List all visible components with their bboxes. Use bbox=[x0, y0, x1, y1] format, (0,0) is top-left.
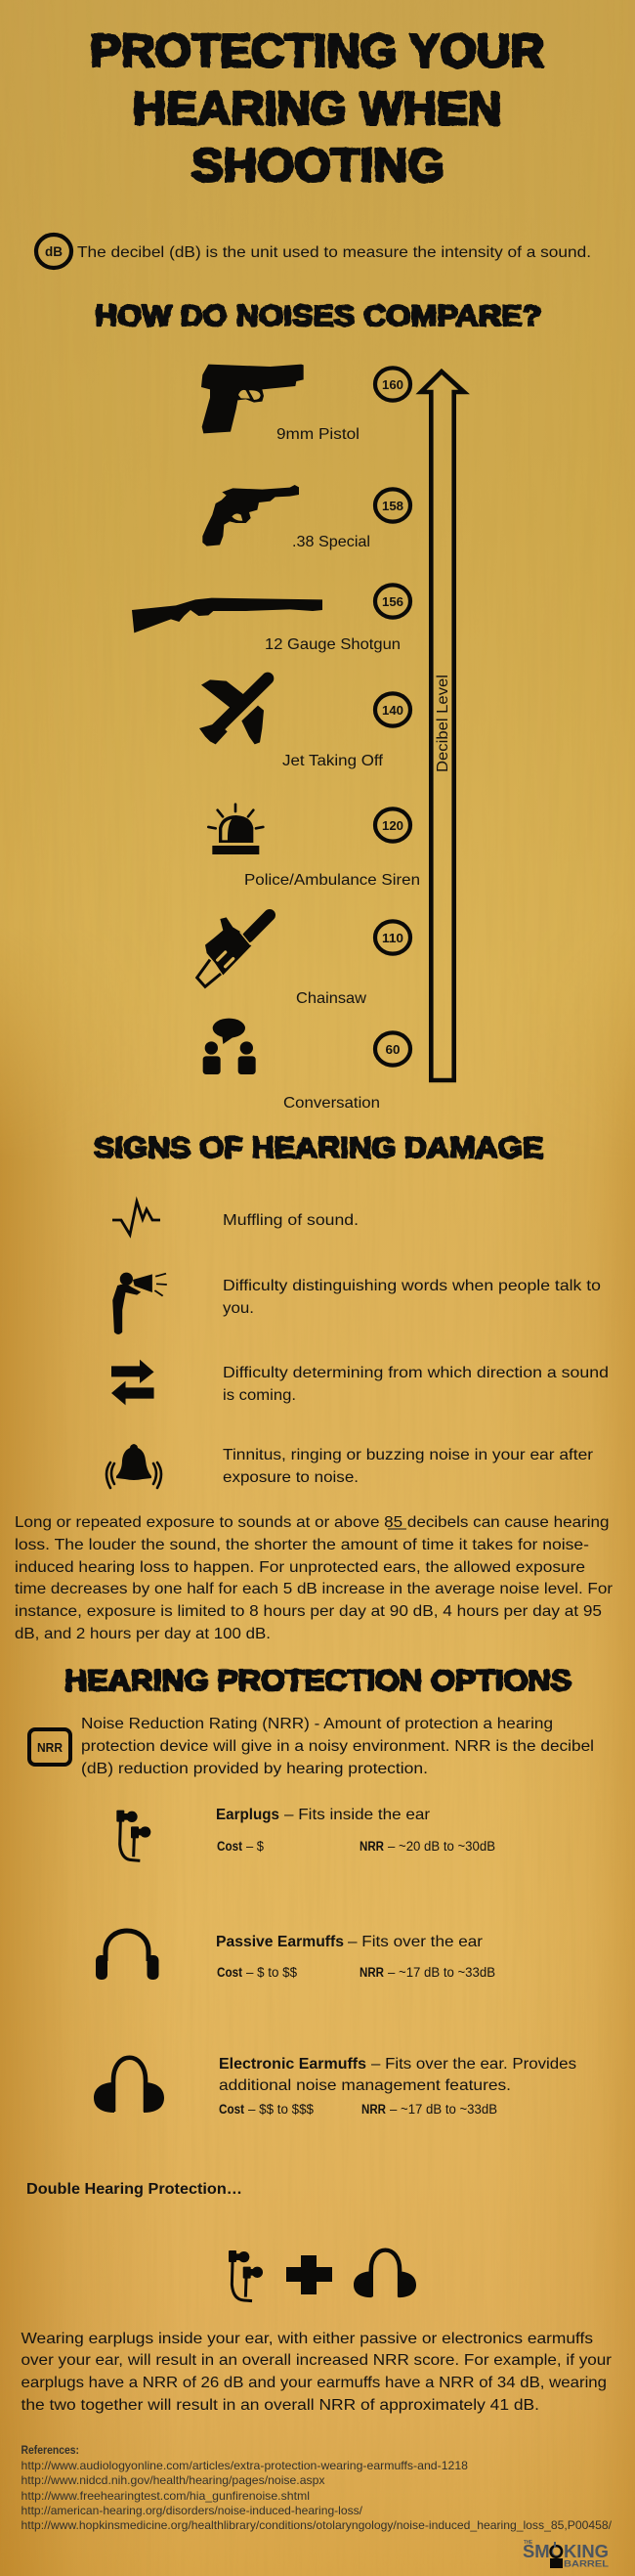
icon: earmuffs bbox=[354, 2250, 416, 2297]
icon: jet bbox=[199, 678, 268, 744]
badge: 156 dB: 156 bbox=[382, 595, 403, 609]
heading: signs of hearing damage: SIGNS OF HEARING DAMAGE bbox=[94, 1132, 543, 1164]
badge: 60 dB bbox=[375, 1032, 410, 1066]
icon: siren bbox=[208, 805, 263, 854]
badge: 140 dB bbox=[375, 693, 410, 726]
noise row: 12 gauge shotgun bbox=[132, 585, 410, 653]
references: http://www.audiologyonline.com/articles/extra-protection-wearing-earmuffs-and-1218 bbox=[21, 2459, 468, 2472]
noise row: .38 special bbox=[202, 485, 410, 550]
text: sound direction bbox=[223, 1365, 609, 1404]
text: passive earmuffs NRR: NRR bbox=[360, 1965, 384, 1980]
icon: electronic earmuffs bbox=[94, 2058, 164, 2113]
icon: dB badge bbox=[36, 235, 71, 268]
icon: conversation bbox=[203, 1019, 256, 1074]
text: passive earmuffs cost: Cost bbox=[217, 1965, 242, 1980]
badge: 60 dB: 60 bbox=[385, 1043, 401, 1057]
text block: exposure explanation: instance, exposure is limited to 8 hours per day at 90 dB, 4 hours per day at 95 bbox=[15, 1603, 602, 1620]
text: passive earmuffs title bbox=[216, 1934, 484, 1950]
option: electronic earmuffs bbox=[94, 2056, 576, 2117]
references: References: bbox=[21, 2443, 79, 2457]
label: .38 special: .38 Special bbox=[292, 534, 370, 550]
icon: person with megaphone bbox=[112, 1273, 167, 1334]
badge: 110 dB bbox=[375, 921, 410, 954]
text: earplugs title: Earplugs bbox=[216, 1807, 279, 1823]
text: electronic earmuffs description: additional noise management features. bbox=[219, 2077, 511, 2094]
text block: double protection explanation bbox=[21, 2331, 613, 2414]
text: earplugs NRR: NRR bbox=[360, 1839, 384, 1854]
label: 12 gauge shotgun: 12 Gauge Shotgun bbox=[265, 636, 401, 653]
text: earplugs NRR: – ~20 dB to ~30dB bbox=[388, 1839, 495, 1854]
icon: ringing bell bbox=[106, 1444, 161, 1488]
badge: 140 dB: 140 bbox=[382, 704, 403, 718]
references: http://www.freehearingtest.com/hia_gunfirenoise.shtml bbox=[21, 2489, 310, 2503]
text: distinguishing words: you. bbox=[223, 1300, 254, 1317]
text: earplugs cost bbox=[217, 1839, 264, 1854]
title bbox=[90, 24, 544, 191]
noise row: chainsaw bbox=[197, 915, 410, 1007]
text: distinguishing words bbox=[223, 1278, 601, 1317]
text: electronic earmuffs description: Electronic Earmuffs bbox=[219, 2056, 366, 2073]
decibel definition text: The decibel (dB) is the unit used to measure the intensity of a sound. bbox=[77, 244, 591, 261]
text block: exposure explanation: induced hearing loss to happen. For unprotected ears, the allowed exposure bbox=[15, 1559, 585, 1576]
badge: 110 dB: 110 bbox=[382, 932, 403, 945]
text: tinnitus bbox=[223, 1447, 594, 1486]
text: electronic earmuffs NRR: – ~17 dB to ~33dB bbox=[390, 2102, 497, 2117]
title: HEARING WHEN bbox=[133, 82, 501, 134]
sign: tinnitus bbox=[106, 1444, 594, 1488]
references: http://american-hearing.org/disorders/noise-induced-hearing-loss/ bbox=[21, 2504, 363, 2517]
text: earplugs title: – Fits inside the ear bbox=[284, 1807, 431, 1823]
logo: the smoking barrel: SMOKING bbox=[523, 2542, 609, 2561]
text: sound direction: Difficulty determining from which direction a sound bbox=[223, 1365, 609, 1381]
text: earplugs title bbox=[216, 1807, 431, 1823]
references bbox=[21, 2443, 613, 2532]
sign: muffling bbox=[112, 1201, 359, 1235]
text: electronic earmuffs cost: – $$ to $$$ bbox=[248, 2102, 314, 2117]
sign: sound direction bbox=[111, 1360, 609, 1405]
decibel definition bbox=[36, 235, 591, 268]
text: muffling: Muffling of sound. bbox=[223, 1212, 359, 1229]
text: NRR definition: Noise Reduction Rating (NRR) - Amount of protection a hearing bbox=[81, 1716, 553, 1732]
icon: revolver bbox=[202, 485, 299, 546]
icon: dB badge: dB bbox=[45, 244, 63, 259]
heading: hearing protection options: HEARING PROTECTION OPTIONS bbox=[64, 1665, 572, 1697]
label: 9mm pistol: 9mm Pistol bbox=[276, 426, 360, 443]
badge: 160 dB: 160 bbox=[382, 378, 403, 392]
text: passive earmuffs title: – Fits over the ear bbox=[348, 1934, 484, 1950]
icon: NRR badge: NRR bbox=[37, 1740, 64, 1755]
noise row: police/ambulance siren bbox=[208, 805, 420, 889]
text block: double protection explanation: earplugs have a NRR of 26 dB and your earmuffs have a NRR of 34 dB, wearing bbox=[21, 2375, 607, 2391]
noise row: 9mm pistol bbox=[201, 365, 410, 443]
text block: exposure explanation: time decreases by one half for each 5 dB increase in the average noise level. For bbox=[15, 1581, 614, 1597]
heading: double hearing protection: Double Hearing Protection… bbox=[26, 2181, 242, 2198]
text: passive earmuffs NRR: – ~17 dB to ~33dB bbox=[388, 1965, 495, 1980]
badge: 160 dB bbox=[375, 368, 410, 401]
badge: 158 dB: 158 bbox=[382, 500, 403, 513]
icon: plus sign bbox=[286, 2255, 332, 2294]
noise row: conversation bbox=[203, 1019, 410, 1112]
text: tinnitus: exposure to noise. bbox=[223, 1469, 359, 1486]
text: electronic earmuffs description bbox=[219, 2056, 576, 2094]
text block: double protection explanation: Wearing earplugs inside your ear, with either passive or electronics earmuffs bbox=[21, 2331, 593, 2347]
text: electronic earmuffs description: – Fits over the ear. Provides bbox=[371, 2056, 576, 2073]
text: passive earmuffs title: Passive Earmuffs bbox=[216, 1934, 344, 1950]
noise row: jet taking off bbox=[199, 678, 410, 769]
sign: distinguishing words bbox=[112, 1273, 601, 1334]
label: conversation: Conversation bbox=[283, 1095, 380, 1112]
text: earplugs cost: – $ bbox=[246, 1839, 264, 1854]
text: tinnitus: Tinnitus, ringing or buzzing noise in your ear after bbox=[223, 1447, 594, 1463]
option: earplugs bbox=[116, 1807, 495, 1860]
text: NRR definition bbox=[81, 1716, 594, 1777]
badge: 156 dB bbox=[375, 585, 410, 618]
text: earplugs cost: Cost bbox=[217, 1839, 242, 1854]
label: chainsaw: Chainsaw bbox=[296, 990, 366, 1007]
text block: exposure explanation: loss. The louder the sound, the shorter the amount of time it takes for noise- bbox=[15, 1537, 589, 1553]
badge: 158 dB bbox=[375, 489, 410, 522]
logo: the smoking barrel: BARREL bbox=[564, 2559, 610, 2569]
icon: earplugs bbox=[229, 2250, 263, 2301]
text block: exposure explanation: Long or repeated exposure to sounds at or above 85 decibels can cause hearing bbox=[15, 1514, 610, 1531]
icon: earplugs bbox=[116, 1811, 150, 1860]
logo: the smoking barrel bbox=[523, 2540, 610, 2569]
label: jet taking off: Jet Taking Off bbox=[282, 753, 384, 769]
text: electronic earmuffs cost: Cost bbox=[219, 2102, 244, 2117]
arrow: decibel level scale bbox=[421, 371, 464, 1080]
NRR definition bbox=[29, 1716, 594, 1777]
label: police/ambulance siren: Police/Ambulance Siren bbox=[244, 872, 420, 889]
text block: double protection explanation: over your ear, will result in an overall increased NRR score. For example, if your bbox=[21, 2352, 613, 2369]
badge: 120 dB: 120 bbox=[382, 819, 403, 833]
text: distinguishing words: Difficulty distinguishing words when people talk to bbox=[223, 1278, 601, 1294]
text: passive earmuffs cost bbox=[217, 1965, 297, 1980]
icon group: earplugs plus earmuffs bbox=[229, 2250, 416, 2301]
icon: chainsaw bbox=[197, 915, 270, 986]
arrow: decibel level scale: Decibel Level bbox=[435, 675, 451, 772]
icon: shotgun bbox=[132, 598, 322, 633]
text block: exposure explanation: dB, and 2 hours per day at 100 dB. bbox=[15, 1626, 271, 1642]
text: sound direction: is coming. bbox=[223, 1387, 296, 1404]
icon: sound wave bbox=[112, 1201, 160, 1235]
option: passive earmuffs bbox=[96, 1931, 495, 1980]
text: electronic earmuffs cost bbox=[219, 2102, 314, 2117]
logo: the smoking barrel: THE bbox=[524, 2540, 533, 2546]
text block: exposure explanation bbox=[15, 1514, 614, 1642]
text: passive earmuffs cost: – $ to $$ bbox=[246, 1965, 297, 1980]
title: PROTECTING YOUR bbox=[90, 24, 544, 76]
text: NRR definition: protection device will give in a noisy environment. NRR is the decibel bbox=[81, 1738, 594, 1755]
text: NRR definition: (dB) reduction provided by hearing protection. bbox=[81, 1761, 428, 1777]
icon: passive earmuffs bbox=[96, 1931, 158, 1980]
text block: double protection explanation: the two together will result in an overall NRR of approximately 41 dB. bbox=[21, 2397, 539, 2414]
references: http://www.hopkinsmedicine.org/healthlibrary/conditions/otolaryngology/noise-induced_hearing_loss_85,P00458/ bbox=[21, 2518, 613, 2532]
icon: NRR badge bbox=[29, 1729, 70, 1765]
icon: opposing arrows bbox=[111, 1360, 154, 1405]
references: http://www.nidcd.nih.gov/health/hearing/pages/noise.aspx bbox=[21, 2473, 324, 2487]
icon: pistol bbox=[201, 365, 304, 433]
title: SHOOTING bbox=[191, 139, 444, 191]
badge: 120 dB bbox=[375, 808, 410, 842]
text: electronic earmuffs NRR: NRR bbox=[361, 2102, 386, 2117]
heading: how do noises compare: HOW DO NOISES COMPARE? bbox=[95, 300, 541, 332]
